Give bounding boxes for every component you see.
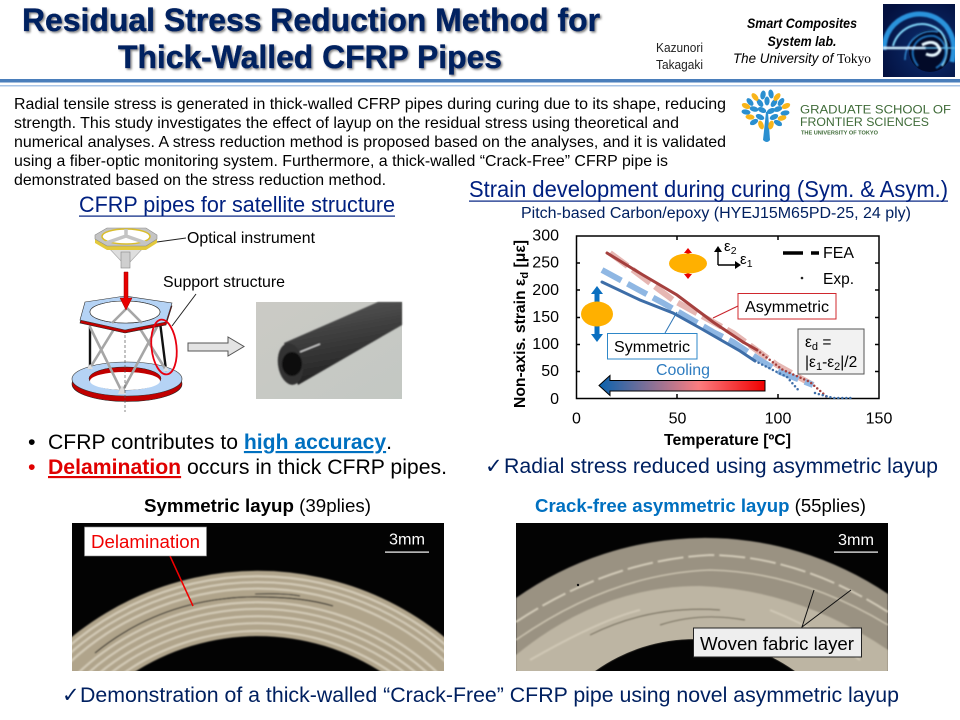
upper hexagon <box>80 296 172 333</box>
formula box: 2 <box>834 361 840 373</box>
strain axes icon: ε <box>740 251 747 268</box>
callout: asymmetric: Asymmetric <box>745 299 829 316</box>
x tick labels: 0 <box>572 410 581 428</box>
label: delamination <box>84 527 206 556</box>
caption: crack-free layup: Crack-free asymmetric layup (55plies) <box>535 495 866 516</box>
formula box: d <box>812 341 818 353</box>
y tick labels: 300 <box>532 228 559 244</box>
legend <box>783 245 854 288</box>
y tick labels: 150 <box>532 309 559 326</box>
x tick labels: 100 <box>765 410 791 428</box>
bullet list: • <box>28 455 36 479</box>
x tick labels: 50 <box>669 410 686 428</box>
scale bar: 3mm <box>838 532 874 549</box>
author <box>656 40 703 72</box>
lab name: Smart Composites <box>747 15 857 31</box>
strain axes icon: 1 <box>747 258 753 270</box>
load arrow <box>120 272 132 310</box>
photo: crack-free cross-section <box>516 523 888 671</box>
takeaway: demonstration: ✓ <box>62 683 80 707</box>
scale bar <box>385 532 429 553</box>
photo: CFRP pipe <box>256 302 402 399</box>
scale bar: 3mm <box>389 532 425 548</box>
strain axes icon <box>714 238 753 270</box>
formula box: |/2 <box>840 354 857 371</box>
FEA curves <box>602 253 813 385</box>
label: cooling: Cooling <box>656 362 710 379</box>
icon: graduate school logo <box>741 89 951 142</box>
legend: FEA <box>823 245 854 262</box>
bullet list: CFRP contributes to high accuracy. <box>48 430 392 454</box>
school name: GRADUATE SCHOOL OF <box>800 104 951 116</box>
formula box: = <box>818 334 831 351</box>
pointers <box>802 590 851 627</box>
y tick labels: 50 <box>541 363 559 380</box>
heading: strain development: Strain development during curing (Sym. & Asym.) <box>469 176 948 202</box>
intro text: Radial tensile stress is generated in thick-walled CFRP pipes during curing due to its shape, reducing <box>14 96 726 113</box>
label: support structure <box>163 274 285 326</box>
y tick labels <box>532 228 559 408</box>
y axis title: d <box>519 272 531 279</box>
chart: strain vs temperature <box>512 228 892 449</box>
tree <box>741 89 791 142</box>
header rule <box>0 79 960 86</box>
y axis title: [με] <box>512 240 529 272</box>
author: Kazunori <box>656 40 703 55</box>
label: woven fabric layer: Woven fabric layer <box>700 634 854 654</box>
experimental curves <box>602 253 852 398</box>
y tick labels: 0 <box>550 391 559 408</box>
y tick labels: 250 <box>532 254 559 272</box>
takeaway: radial stress: Radial stress reduced using asymmetric layup <box>504 454 938 478</box>
y axis title: Non-axis. strain ε <box>512 280 529 408</box>
takeaway: demonstration: Demonstration of a thick-walled “Crack-Free” CFRP pipe using novel asymmetric layup <box>80 683 899 707</box>
formula box: |ε <box>805 354 816 371</box>
lab name: System lab. <box>768 33 836 49</box>
lab name: The University of Tokyo <box>733 50 871 67</box>
label: optical instrument: Optical instrument <box>187 230 316 247</box>
arrow: to photo <box>188 337 244 356</box>
y tick labels: 200 <box>532 282 559 299</box>
arrow: cooling <box>599 376 765 396</box>
bullet list <box>28 430 447 479</box>
school name <box>800 104 951 136</box>
intro text: using a fiber-optic monitoring system. Furthermore, a thick-walled “Crack-Free” CFRP pipe is <box>14 153 668 170</box>
callout: symmetric <box>608 312 697 359</box>
x tick labels <box>572 410 892 428</box>
title: Residual Stress Reduction Method for <box>22 2 600 38</box>
struts <box>87 308 169 394</box>
school name: THE UNIVERSITY OF TOKYO <box>801 130 878 136</box>
intro text: strength. This study investigates the effect of layup on the residual stress using theoretical and <box>14 115 679 132</box>
icon: symmetric ellipse <box>581 286 613 342</box>
intro text <box>14 96 726 189</box>
delamination pointer <box>170 556 193 606</box>
optical instrument <box>95 228 157 268</box>
strain axes icon: 2 <box>731 245 737 257</box>
formula box: 1 <box>816 361 822 373</box>
label: woven fabric layer <box>694 628 862 657</box>
highlight ellipse <box>149 318 179 376</box>
takeaway: radial stress: ✓ <box>485 454 503 478</box>
formula box: ε <box>805 334 812 351</box>
school name: FRONTIER SCIENCES <box>800 117 929 129</box>
icon: asymmetric ellipse <box>669 248 707 279</box>
y tick labels: 100 <box>532 336 559 353</box>
author: Takagaki <box>656 57 703 72</box>
legend: Exp. <box>823 271 854 288</box>
intro text: numerical analyses. A stress reduction method is proposed based on the analyses, and it is validated <box>14 134 726 151</box>
caption: symmetric layup: Symmetric layup (39plies) <box>144 495 371 516</box>
photo: symmetric cross-section <box>72 523 444 671</box>
label: delamination: Delamination <box>91 531 200 552</box>
strain axes icon: ε <box>724 238 731 255</box>
lower ring <box>72 362 182 402</box>
x tick labels: 150 <box>866 410 892 428</box>
title: Thick-Walled CFRP Pipes <box>118 39 502 75</box>
subheading: material: Pitch-based Carbon/epoxy (HYEJ15M65PD-25, 24 ply) <box>521 205 911 222</box>
callout: symmetric: Symmetric <box>614 339 690 356</box>
lab name <box>733 15 871 67</box>
icon: lab logo <box>883 4 955 77</box>
plot frame <box>576 236 879 398</box>
bullet list: Delamination occurs in thick CFRP pipes. <box>48 455 447 479</box>
formula box <box>798 329 864 374</box>
x axis title: Temperature [ºC] <box>664 432 791 449</box>
label: support structure: Support structure <box>163 274 285 291</box>
axis <box>124 335 126 412</box>
bullet list: • <box>28 430 36 454</box>
formula box: -ε <box>822 354 834 371</box>
heading: CFRP pipes: CFRP pipes for satellite structure <box>79 192 395 217</box>
callout: asymmetric <box>713 294 836 319</box>
diagram: satellite structure <box>72 228 316 412</box>
scale bar <box>834 532 878 553</box>
intro text: demonstrated based on the stress reduction method. <box>14 172 386 189</box>
title <box>22 2 600 75</box>
